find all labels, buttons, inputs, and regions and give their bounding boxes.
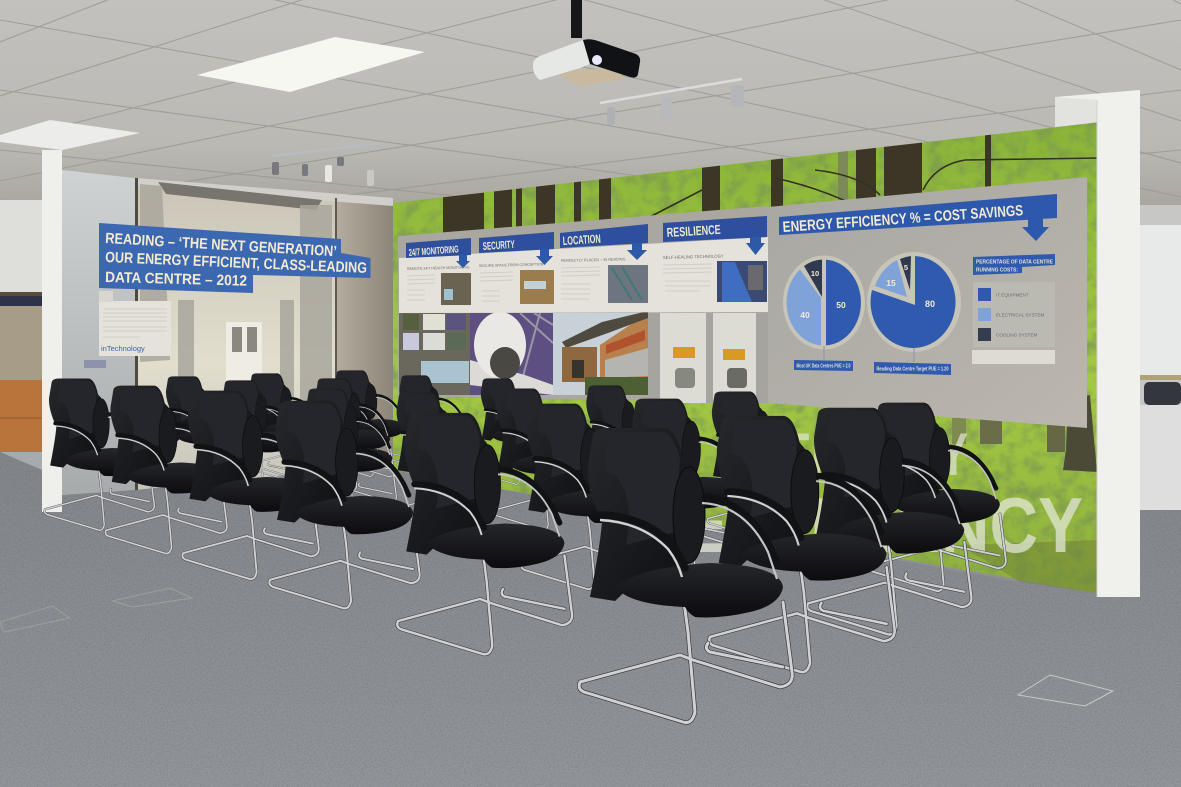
left wall information note: inTechnology	[101, 344, 145, 353]
track light: left	[272, 143, 382, 186]
legend: IT EQUIPMENT	[996, 292, 1029, 298]
mural ghost lettering: ENERGY	[782, 421, 968, 488]
legend heading: RUNNING COSTS:	[976, 268, 1018, 274]
projector	[533, 0, 640, 87]
panel: 24/7 monitoring	[406, 238, 471, 305]
pie chart: Reading data centre: Reading Data Centre Target PUE = 1.20	[876, 366, 949, 372]
service panels: white content band	[399, 237, 768, 313]
chair	[583, 385, 672, 509]
panel: location: LOCATION	[562, 232, 601, 248]
panel: resilience	[663, 216, 767, 302]
left side wall	[62, 170, 393, 495]
track light: right	[600, 79, 744, 125]
chair	[397, 375, 469, 475]
tree trunks	[443, 120, 1097, 472]
heading banner: ENERGY EFFICIENCY % = COST SAVINGS	[782, 202, 1024, 236]
chair	[182, 391, 319, 579]
panel: security: SECURE SPACE FROM CONCEPTION	[479, 262, 544, 268]
chair	[493, 388, 595, 530]
service panels: grey backing	[398, 206, 768, 403]
ceiling	[0, 0, 1181, 287]
chair	[397, 413, 572, 654]
left wall sign: title: DATA CENTRE – 2012	[105, 269, 247, 290]
chair	[220, 380, 301, 492]
chair	[579, 428, 792, 723]
panel: location: PERFECTLY PLACED – IN READING	[561, 257, 626, 263]
ceiling light panel: large	[197, 37, 425, 92]
left wall information note	[99, 291, 171, 356]
left pillar	[42, 150, 62, 512]
mural ghost lettering: EFFICIENCY	[683, 481, 1083, 569]
chair	[303, 388, 396, 518]
chair	[332, 370, 408, 476]
panel: security	[479, 232, 554, 304]
panel: security: SECURITY	[482, 239, 516, 253]
photo: security camera	[470, 312, 553, 395]
chair	[709, 416, 895, 672]
legend heading	[973, 254, 1055, 275]
mural ground leaves	[960, 540, 1097, 593]
chair	[478, 378, 554, 484]
chair	[869, 403, 1006, 591]
pie chart: most UK data centres: 50	[836, 300, 846, 310]
left wall sign: title: READING – ‘THE NEXT GENERATION’	[105, 230, 337, 260]
chair	[105, 386, 227, 553]
chair	[45, 379, 154, 530]
chair	[313, 378, 394, 490]
photo: server racks	[648, 313, 768, 403]
legend footnote	[972, 350, 1055, 364]
right pillar	[1055, 90, 1140, 597]
panel: 24/7 monitoring: REMOTE 24/7 HEALTH MONITORING	[407, 265, 470, 271]
pie chart: most UK data centres	[783, 256, 865, 371]
service panels: lower photo strip	[399, 311, 768, 403]
panel: 24/7 monitoring: 24/7 MONITORING	[408, 244, 459, 259]
pie chart: Reading data centre: 5	[904, 263, 908, 272]
chair	[393, 392, 491, 528]
chair	[807, 408, 971, 635]
mural ghost lettering	[683, 421, 1083, 569]
legend heading: PERCENTAGE OF DATA CENTRE	[976, 260, 1053, 266]
forest mural wall	[393, 120, 1102, 593]
legend: COOLING SYSTEM	[996, 332, 1038, 338]
legend	[973, 282, 1055, 347]
pie chart: Reading data centre	[867, 252, 961, 375]
photo: building	[553, 311, 648, 395]
chairs: front row	[45, 379, 792, 723]
legend: ELECTRICAL SYSTEM	[996, 312, 1045, 318]
chair	[269, 401, 420, 608]
floor access hatches	[0, 588, 1113, 706]
ceiling light panel: small	[0, 120, 140, 150]
left wall sign: title: OUR ENERGY EFFICIENT, CLASS-LEADING	[105, 249, 367, 277]
panel: resilience: SELF-HEALING TECHNOLOGY	[663, 253, 724, 260]
chair	[627, 399, 751, 569]
chair	[708, 392, 814, 539]
tree branches	[651, 157, 1096, 216]
back wall: far left with cabinet	[0, 200, 42, 482]
chair	[247, 373, 323, 479]
photo: monitoring room	[399, 313, 470, 395]
panel: location	[560, 224, 648, 303]
pie chart: Reading data centre: 80	[925, 299, 935, 309]
chair	[163, 376, 244, 488]
panel: resilience: RESILIENCE	[666, 222, 721, 240]
chair	[521, 404, 656, 589]
right background: window, chair and table beyond the wall	[1138, 205, 1181, 515]
panel: energy efficiency	[768, 177, 1087, 428]
carpet floor	[0, 452, 1181, 787]
pie chart: Reading data centre: 15	[886, 278, 896, 288]
chairs: back rows	[163, 370, 814, 589]
pie chart: most UK data centres: 10	[811, 269, 819, 278]
left wall sign: title	[99, 223, 370, 293]
chairs: right front rows	[709, 403, 1006, 672]
pie chart: most UK data centres: 40	[800, 310, 810, 320]
pie chart: most UK data centres: Most UK Data Centres PUE = 2.0	[796, 364, 851, 370]
